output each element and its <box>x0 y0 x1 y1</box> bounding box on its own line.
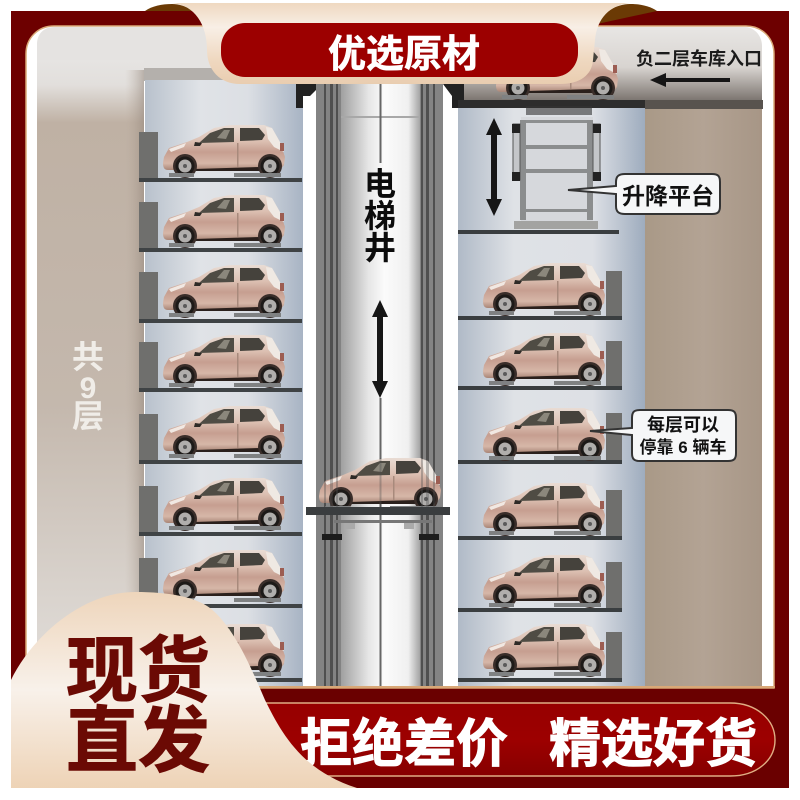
callout: six cars per floor: 停靠 6 辆车 <box>640 437 726 457</box>
label: elevator shaft: 梯 <box>364 198 396 234</box>
label: total floors: 共 <box>72 339 104 375</box>
label: elevator shaft: 井 <box>364 230 396 266</box>
label: total floors: 层 <box>72 398 104 434</box>
left wall <box>37 60 144 687</box>
label: elevator shaft <box>364 166 396 266</box>
left parking bays <box>139 68 316 688</box>
callout: lift platform <box>568 174 720 214</box>
panel base with tan edge <box>26 26 774 688</box>
title text: 优选原材 <box>328 34 480 76</box>
upper wall band <box>37 27 460 72</box>
arrow: elevator travel <box>372 300 388 398</box>
arrow: garage entrance <box>650 73 730 87</box>
callout: six cars per floor: 每层可以 <box>647 415 719 435</box>
right parking bays <box>458 108 645 688</box>
label: garage entrance: 负二层车库入口 <box>636 48 762 69</box>
elevator shaft <box>296 84 464 688</box>
garage slab with entry car <box>458 47 763 109</box>
lift platform <box>512 106 601 229</box>
badge line 1: 现货 <box>66 632 210 712</box>
title ribbon <box>145 3 657 84</box>
badge: in-stock direct <box>11 592 357 788</box>
panel bottom edge <box>26 686 775 688</box>
elevator platform with car <box>306 458 450 540</box>
slogan right: 精选好货 <box>549 716 757 774</box>
cars: right column <box>483 263 605 677</box>
label: total floors: 9 <box>80 372 96 405</box>
label: total floors <box>72 339 104 434</box>
right wall <box>645 108 762 687</box>
title bar <box>221 23 578 77</box>
garage upper area <box>460 27 762 100</box>
badge line 2: 直发 <box>66 702 210 782</box>
label: elevator shaft: 电 <box>364 166 396 202</box>
slogan left: 拒绝差价 <box>300 716 508 774</box>
callout: lift platform: 升降平台 <box>622 183 714 209</box>
cars: left column <box>163 125 285 677</box>
panel: parking tower cutaway <box>26 26 775 688</box>
arrow: lift travel <box>486 118 502 216</box>
banner: bottom slogan <box>250 703 775 776</box>
callout: six cars per floor <box>590 410 736 461</box>
